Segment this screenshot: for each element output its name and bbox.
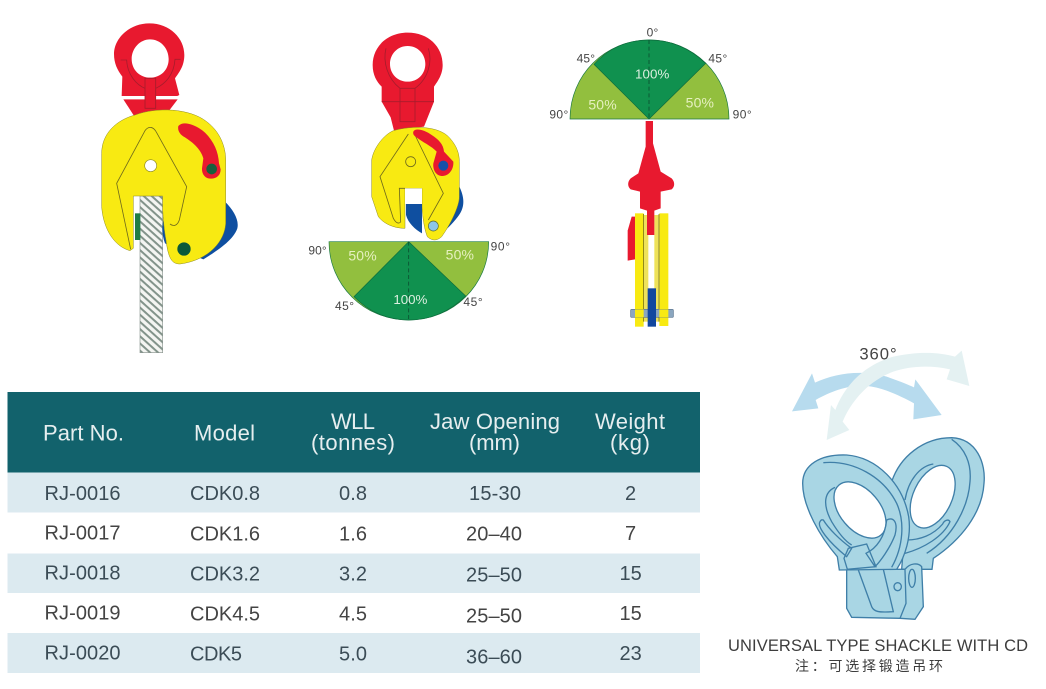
table row: RJ-0016: CDK0.8 [190,483,260,505]
icon: red shackle [114,23,184,117]
table row: RJ-0019: 25–50 [466,605,522,627]
caption: Chinese note: 注：可选择锻造吊环 [795,658,943,674]
icon: red handle [413,129,453,176]
table row: RJ-0018: CDK3.2 [190,564,260,586]
label: 90 degrees left: 90° [549,108,569,122]
table row: RJ-0019 [44,602,642,627]
table row: RJ-0019: 15 [620,603,642,625]
caption: shackle title: UNIVERSAL TYPE SHACKLE WITH CD [728,637,1028,655]
label: 360 degrees: 360° [859,344,897,363]
table header: (mm) [469,430,520,455]
table row: RJ-0016: 2 [625,483,636,505]
table: specifications [8,392,700,673]
table header: WLL [331,409,375,434]
chart: upper working load sector [570,40,729,119]
table row: RJ-0016: RJ-0016 [44,483,120,505]
table row: RJ-0020: 23 [620,643,642,665]
icon: shackle base [847,564,923,619]
chart: upper working load sector: 50% [588,96,617,112]
table row: RJ-0017: 1.6 [339,524,367,546]
icon: light blue pin [428,221,438,231]
icon: red shackle [373,33,443,131]
label: 0 degrees: 0° [647,26,659,40]
table row: RJ-0018: RJ-0018 [44,562,120,584]
label: 90 degrees right: 90° [733,108,752,122]
table row: RJ-0018: 25–50 [466,565,522,587]
clamp diagram: vertical lift with load sector [308,33,510,320]
label: 90 degrees right: 90° [491,240,510,254]
arrow: pale swing arrow [827,351,969,440]
clamp diagram: front view holding plate [102,23,238,353]
table header: Part No. [43,420,124,446]
table header: Model [194,420,255,446]
arrow: blue swing arrow [792,373,942,419]
chart: lower working load sector: 100% [393,292,427,307]
table header: (kg) [610,430,650,455]
chart: lower working load sector [329,242,489,320]
table row: RJ-0019: CDK4.5 [190,604,260,626]
icon: front shackle ring [803,455,909,570]
icon: red handle [178,123,221,179]
table row: RJ-0019: 4.5 [339,604,367,626]
table row: RJ-0016: 15-30 [469,483,521,505]
icon: yellow clamp body [372,127,459,240]
table row: RJ-0017 [44,522,636,546]
icon: blue bolt [631,288,673,327]
icon: yellow side plates [635,213,668,327]
label: 45 degrees right: 45° [708,52,728,66]
clamp diagram: side view with load sector [549,26,752,327]
table header: (tonnes) [311,430,395,455]
chart: lower working load sector: 50% [446,246,474,262]
table header: Weight [595,409,665,434]
chart: upper working load sector: 50% [686,95,714,111]
icon: rear shackle ring [892,438,984,569]
icon: red shackle side view [628,121,674,235]
table row: RJ-0017: 20–40 [466,524,522,546]
icon: blue cam [433,187,463,235]
table row: RJ-0018: 3.2 [339,564,367,586]
icon: yellow clamp body [102,110,226,264]
table row: RJ-0020: CDK5 [190,644,242,666]
table row: RJ-0016: 0.8 [339,483,367,505]
panel: universal shackle [792,344,984,619]
icon: blue cam [162,202,238,259]
table row: RJ-0017: 7 [625,523,636,545]
table row: RJ-0018 [8,554,700,593]
table row: RJ-0017: RJ-0017 [44,522,120,544]
table header [8,392,700,472]
label: 45 degrees left: 45° [577,52,595,66]
table row: RJ-0020: 36–60 [466,646,522,668]
icon: green pivot pin [177,242,191,256]
table row: RJ-0020 [8,633,700,673]
icon: steel plate [140,196,163,353]
table row: RJ-0020: 5.0 [339,644,367,666]
table row: RJ-0018: 15 [620,563,642,585]
icon: opening and blue jaw insert [405,188,422,233]
icon: red side handle [628,217,635,261]
label: 45 degrees left: 45° [335,299,354,313]
chart: upper working load sector: 100% [635,67,669,82]
table row: RJ-0016 [8,472,700,512]
table row: RJ-0020: RJ-0020 [44,642,120,664]
label: 45 degrees right: 45° [463,295,483,309]
label: 90 degrees left: 90° [308,243,327,257]
icon: green pad [135,213,140,240]
chart: lower working load sector: 50% [348,248,377,264]
table row: RJ-0017: CDK1.6 [190,524,260,546]
table header: Jaw Opening [430,409,560,434]
table row: RJ-0019: RJ-0019 [44,602,120,624]
